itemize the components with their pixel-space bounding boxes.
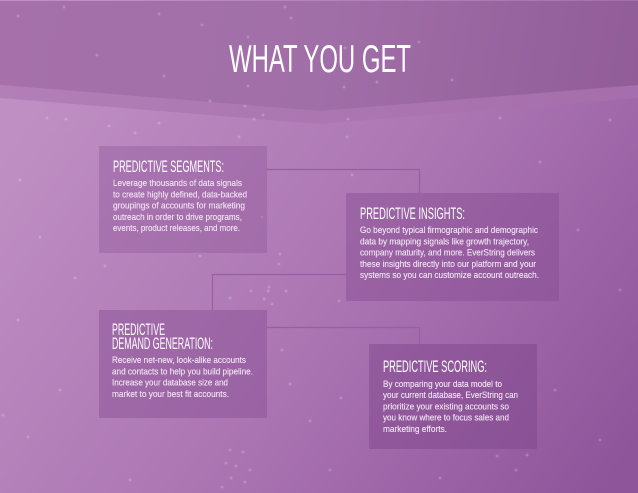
header band	[0, 1, 638, 124]
title: WHAT YOU GET	[229, 38, 411, 81]
text: demand generation body: Increase your database size and	[112, 378, 228, 388]
text: predictive insights body: Go beyond typical firmographic and demographic	[360, 225, 539, 235]
heading: predictive segments: PREDICTIVE SEGMENTS:	[113, 158, 224, 176]
panel: predictive scoring	[369, 344, 537, 449]
heading: predictive scoring: PREDICTIVE SCORING:	[383, 358, 487, 376]
text: demand generation body: market to your best fit accounts.	[112, 389, 229, 399]
heading: predictive demand generation: PREDICTIVE	[112, 321, 165, 339]
text: predictive scoring body: you know where to focus sales and	[383, 412, 509, 422]
text: predictive scoring body: your current database, EverString can	[383, 390, 518, 400]
text: predictive segments body: to create highly defined, data-backed	[113, 190, 247, 200]
text: predictive insights body	[360, 225, 539, 280]
panel: predictive insights	[346, 193, 559, 301]
text: predictive segments body: events, product releases, and more.	[113, 223, 240, 233]
text: predictive insights body: company maturity, and more. EverString delivers	[360, 248, 536, 258]
panel: predictive demand generation	[99, 310, 267, 418]
heading: predictive demand generation: DEMAND GENERATION:	[112, 335, 213, 353]
text: predictive segments body	[113, 178, 247, 233]
heading: predictive insights: PREDICTIVE INSIGHTS:	[360, 205, 465, 223]
text: predictive segments body: Leverage thousands of data signals	[113, 178, 243, 188]
text: demand generation body: Receive net-new, look-alike accounts	[112, 355, 247, 365]
heading: predictive demand generation	[112, 321, 213, 353]
text: predictive segments body: groupings of accounts for marketing	[113, 200, 245, 210]
text: demand generation body: and contacts to help you build pipeline.	[112, 366, 253, 376]
text: predictive scoring body: marketing efforts.	[383, 424, 447, 434]
text: predictive segments body: outreach in order to drive programs,	[113, 212, 242, 222]
panel: predictive segments	[99, 146, 267, 253]
text: demand generation body	[112, 355, 253, 399]
connector: demand generation to scoring	[267, 328, 420, 344]
text: predictive scoring body: By comparing your data model to	[383, 379, 502, 389]
connector: insights to demand generation	[212, 274, 346, 310]
text: predictive scoring body	[383, 379, 518, 434]
text: predictive insights body: data by mapping signals like growth trajectory,	[360, 236, 529, 246]
text: predictive insights body: these insights directly into our platform and your	[360, 259, 536, 269]
connector: segments to insights	[267, 170, 420, 193]
text: predictive scoring body: prioritize your existing accounts so	[383, 402, 509, 412]
text: predictive insights body: systems so you can customize account outreach.	[360, 270, 539, 280]
